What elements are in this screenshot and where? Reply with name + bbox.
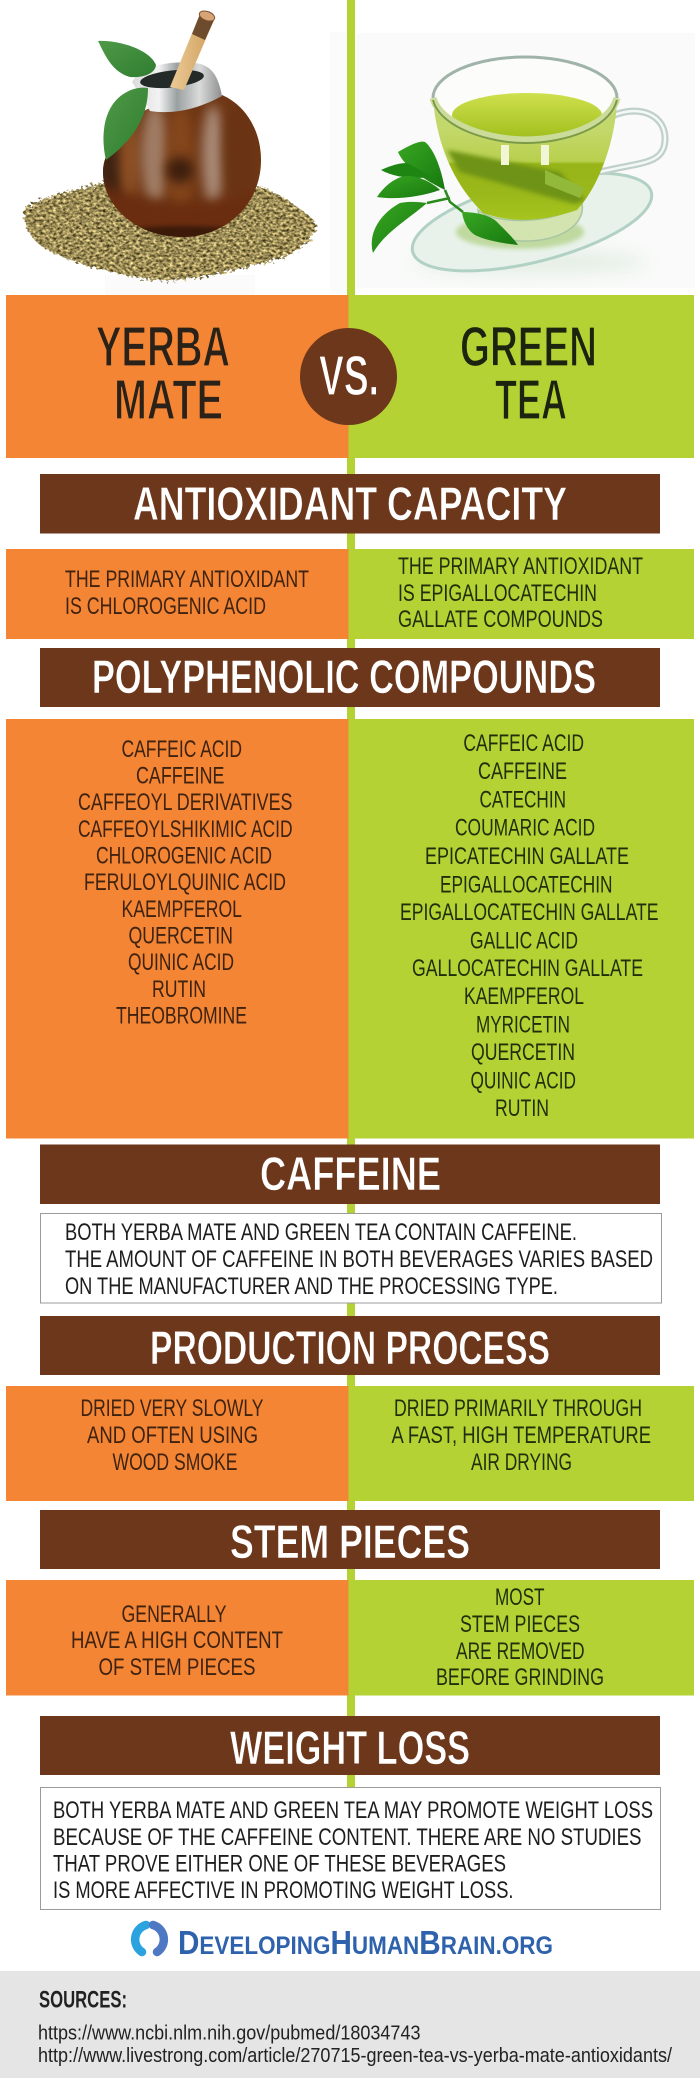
- heading: production process: [40, 1316, 660, 1375]
- panel: polyphenols yerba mate: THEOBROMINE: [116, 1002, 247, 1030]
- panel: polyphenols yerba mate: CAFFEOYL DERIVATIVES: [78, 789, 292, 816]
- text box: caffeine: [40, 1214, 662, 1303]
- heading: caffeine: [40, 1144, 660, 1204]
- panel: polyphenols yerba mate: CAFFEIC ACID: [122, 736, 242, 763]
- herb pile: [24, 182, 316, 280]
- header panel: green tea: [348, 295, 694, 458]
- panel: antioxidant green tea: GALLATE COMPOUNDS: [398, 606, 603, 633]
- panel: stem pieces green tea: MOST: [495, 1584, 545, 1611]
- panel: antioxidant yerba mate: THE PRIMARY ANTIOXIDANT: [65, 566, 309, 593]
- sources heading: SOURCES:: [39, 1986, 127, 2014]
- text box: weight loss: [40, 1788, 660, 1910]
- panel: polyphenols yerba mate: CAFFEOYLSHIKIMIC ACID: [78, 816, 292, 843]
- panel: antioxidant green tea: IS EPIGALLOCATECHIN: [398, 580, 597, 607]
- panel: stem pieces green tea: ARE REMOVED: [456, 1638, 584, 1665]
- text box: weight loss: THAT PROVE EITHER ONE OF THESE BEVERAGES: [53, 1850, 506, 1878]
- panel: polyphenols green tea: RUTIN: [495, 1095, 549, 1122]
- leaf lower: [103, 88, 148, 160]
- heading: caffeine: CAFFEINE: [260, 1147, 441, 1200]
- heading: weight loss: WEIGHT LOSS: [230, 1721, 470, 1774]
- panel: polyphenols yerba mate: CAFFEINE: [136, 762, 224, 790]
- panel: polyphenols yerba mate: QUERCETIN: [128, 922, 233, 950]
- panel: production yerba mate: WOOD SMOKE: [112, 1449, 238, 1476]
- panel: polyphenols green tea: MYRICETIN: [476, 1012, 570, 1038]
- source urls: [38, 2022, 672, 2067]
- heading: stem pieces: STEM PIECES: [230, 1515, 470, 1568]
- panel: polyphenols green tea: EPIGALLOCATECHIN: [440, 871, 612, 898]
- panel: stem pieces yerba mate: [6, 1580, 348, 1696]
- center divider line: [347, 0, 355, 1790]
- panel: polyphenols green tea: QUERCETIN: [471, 1039, 575, 1066]
- panel: polyphenols green tea: CATECHIN: [480, 786, 566, 813]
- panel: stem pieces yerba mate: GENERALLY: [122, 1601, 226, 1628]
- gourd opening: [139, 67, 205, 91]
- cup rim and surface: [433, 57, 617, 143]
- icon: brain ring: [135, 1925, 164, 1952]
- cup bowl: [434, 108, 617, 220]
- panel: polyphenols green tea: KAEMPFEROL: [464, 983, 584, 1010]
- header panel: green tea: TEA: [495, 368, 567, 431]
- panel: polyphenols green tea: EPICATECHIN GALLATE: [425, 843, 629, 870]
- panel: polyphenols yerba mate: CHLOROGENIC ACID: [96, 842, 272, 870]
- saucer: [403, 153, 661, 291]
- header panel: yerba mate: YERBA: [96, 315, 230, 378]
- panel: production green tea: AIR DRYING: [471, 1449, 572, 1476]
- photo: yerba mate gourd: [22, 10, 318, 284]
- leaf upper: [98, 41, 156, 77]
- vs badge: [300, 328, 397, 425]
- panel: antioxidant yerba mate: [6, 549, 348, 639]
- cup handle: [600, 111, 665, 172]
- photo: green tea cup: [372, 56, 668, 285]
- panel: production yerba mate: DRIED VERY SLOWLY: [80, 1395, 264, 1422]
- panel: polyphenols green tea: QUINIC ACID: [470, 1068, 576, 1095]
- panel: sources: [0, 1971, 700, 2078]
- straw: [170, 9, 216, 90]
- panel: stem pieces yerba mate: HAVE A HIGH CONTENT: [71, 1627, 283, 1654]
- panel: stem pieces yerba mate: OF STEM PIECES: [98, 1654, 256, 1681]
- panel: stem pieces green tea: BEFORE GRINDING: [436, 1664, 604, 1691]
- panel: antioxidant yerba mate: IS CHLOROGENIC ACID: [65, 593, 266, 620]
- panel: production yerba mate: [6, 1386, 348, 1501]
- text box: weight loss: IS MORE AFFECTIVE IN PROMOTING WEIGHT LOSS.: [53, 1877, 514, 1904]
- source urls: https://www.ncbi.nlm.nih.gov/pubmed/18034743: [38, 2022, 420, 2044]
- vs badge: VS.: [319, 344, 379, 408]
- panel: polyphenols yerba mate: RUTIN: [152, 976, 206, 1003]
- header panel: green tea: GREEN: [460, 315, 597, 378]
- tea leaves: [372, 142, 518, 253]
- panel: polyphenols yerba mate: QUINIC ACID: [128, 949, 234, 976]
- header panel: yerba mate: [6, 295, 348, 458]
- panel: polyphenols green tea: GALLIC ACID: [470, 927, 578, 954]
- panel: production yerba mate: AND OFTEN USING: [87, 1422, 258, 1449]
- heading: production process: PRODUCTION PROCESS: [150, 1321, 550, 1374]
- panel: polyphenols green tea: CAFFEINE: [478, 758, 567, 785]
- heading: stem pieces: [40, 1510, 660, 1569]
- heading: antioxidant capacity: ANTIOXIDANT CAPACITY: [133, 477, 567, 530]
- panel: polyphenols yerba mate: [6, 719, 348, 1138]
- cup foot: [478, 203, 582, 241]
- header panel: yerba mate: MATE: [114, 368, 223, 431]
- panel: polyphenols green tea: CAFFEIC ACID: [463, 730, 584, 757]
- panel: polyphenols yerba mate: FERULOYLQUINIC ACID: [84, 869, 286, 896]
- logo: developinghumanbrain.org: DEVELOPINGHUMANBRAIN.ORG: [178, 1924, 553, 1961]
- panel: stem pieces green tea: [348, 1580, 694, 1696]
- panel: production green tea: [348, 1386, 694, 1501]
- gourd body: [103, 95, 261, 237]
- silver rim: [132, 62, 222, 112]
- panel: polyphenols green tea: [348, 719, 694, 1138]
- panel: antioxidant green tea: [348, 549, 694, 639]
- panel: polyphenols yerba mate: KAEMPFEROL: [122, 896, 242, 923]
- panel: polyphenols green tea: COUMARIC ACID: [455, 815, 595, 842]
- heading: weight loss: [40, 1716, 660, 1775]
- panel: stem pieces green tea: STEM PIECES: [460, 1611, 580, 1638]
